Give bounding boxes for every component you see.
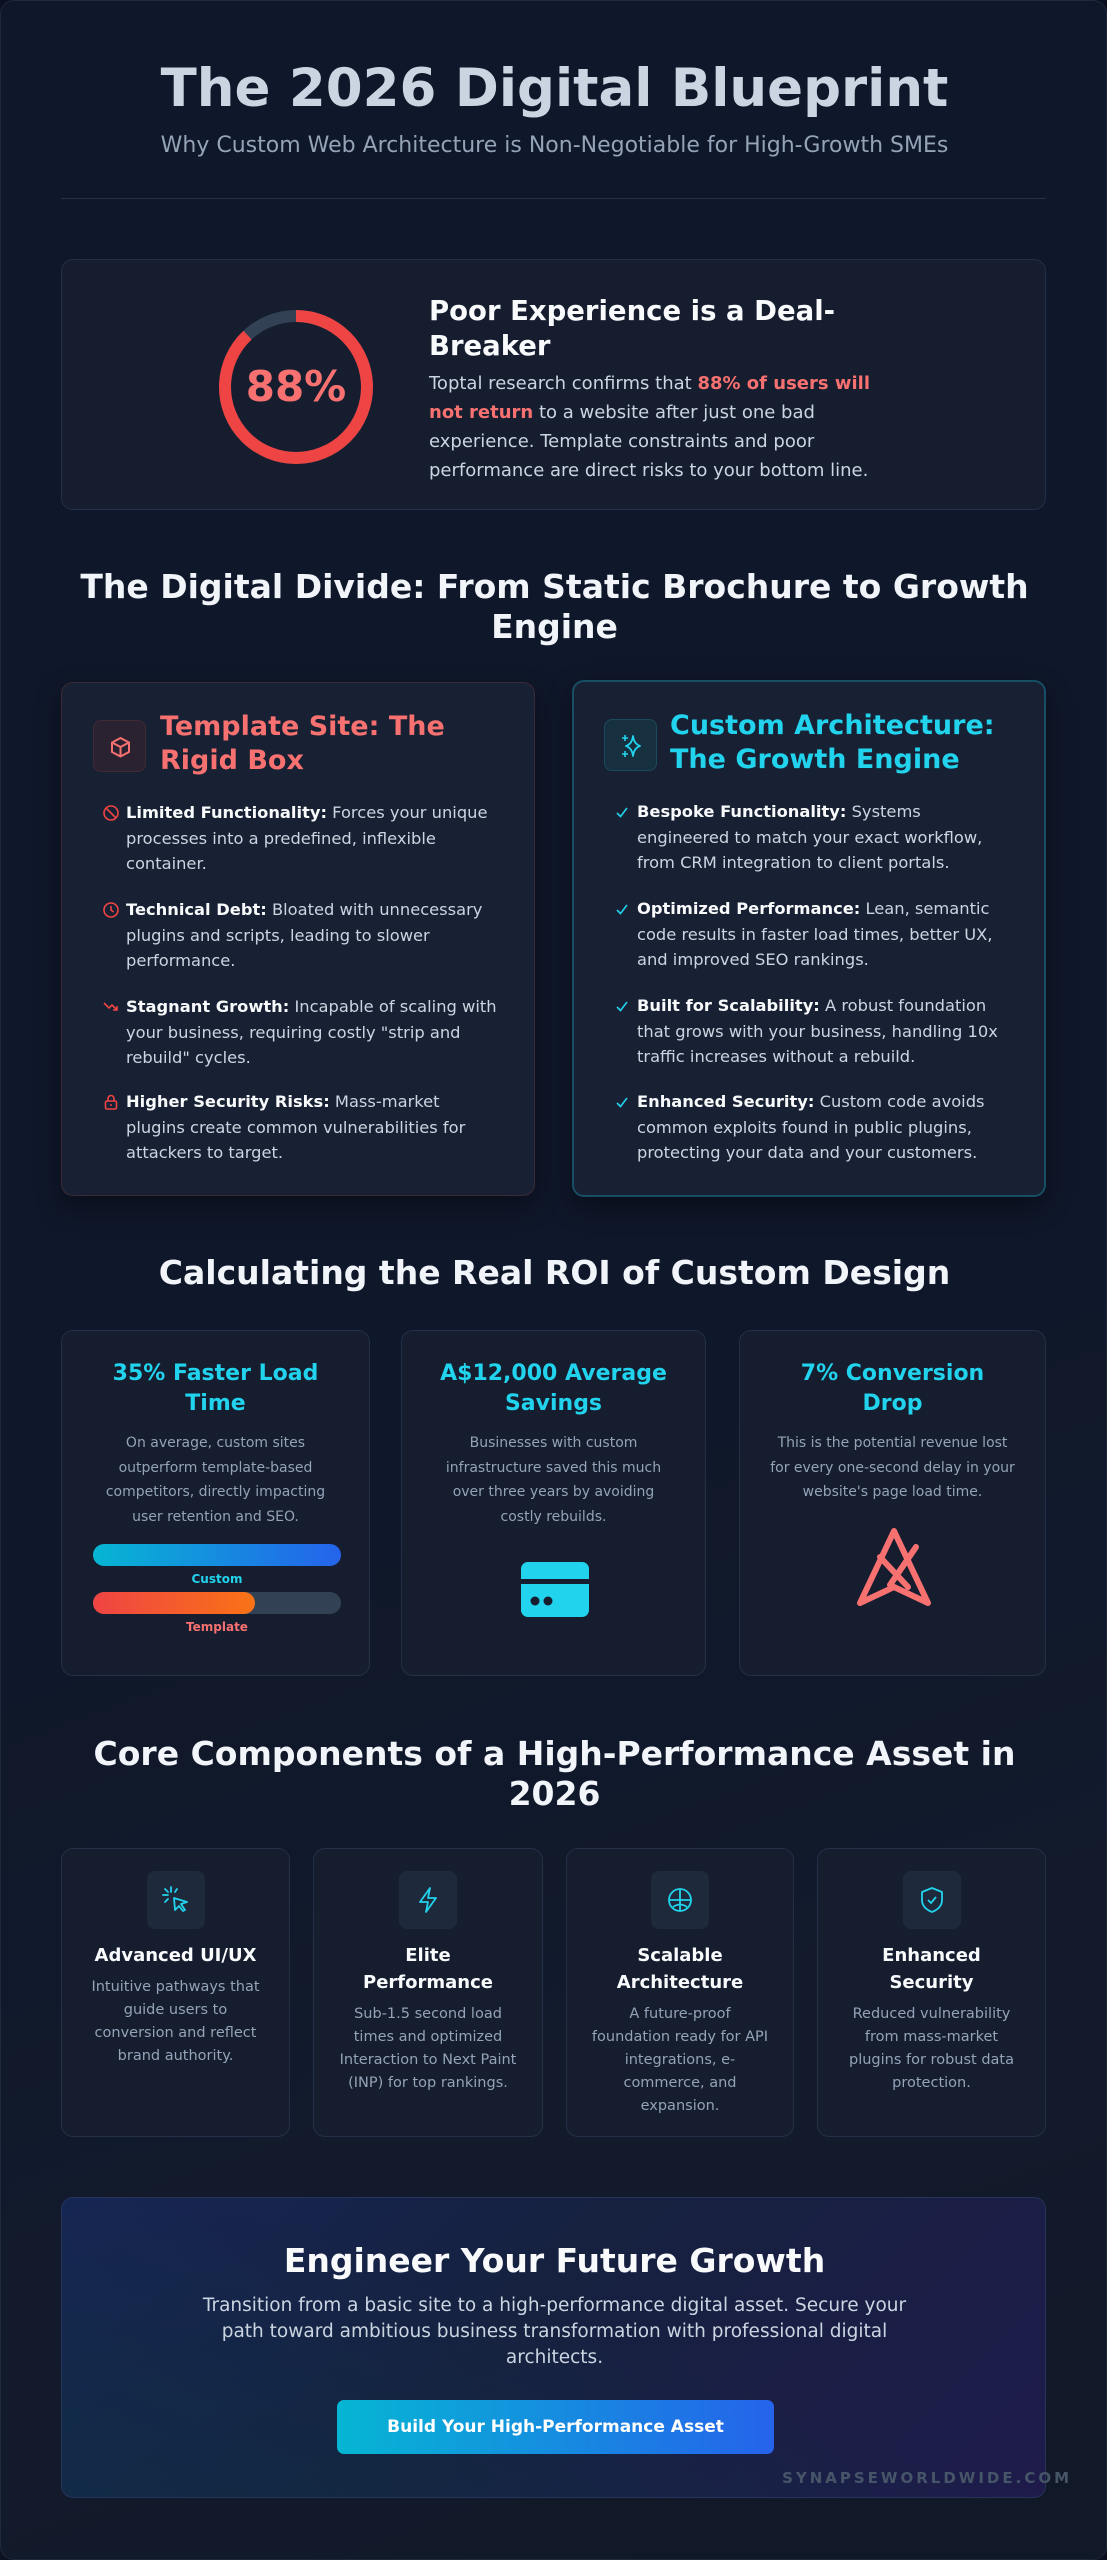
bar chart: custom vs template: Custom (192, 1572, 242, 1586)
card: 35% faster: On average, custom sites outperform template-based competitors, directly impacting user retention and SEO. (106, 1435, 325, 1524)
icon: box (93, 720, 146, 772)
card: advanced UI/UX (61, 1848, 290, 2137)
card: 35% faster (61, 1330, 370, 1676)
card: scalable architecture: A future-proof foundation ready for API integrations, e-commerce, and expansion. (592, 2006, 768, 2114)
heading: core components: Core Components of a High-Performance Asset in 2026 (94, 1734, 1015, 1813)
heading: digital divide: The Digital Divide: From Static Brochure to Growth Engine (80, 567, 1029, 646)
icon: wallet (521, 1562, 589, 1617)
panel: custom architecture (572, 680, 1046, 1197)
item: scalability: Built for Scalability: A robust foundation that grows with your business, handling 10x traffic increases without a rebuild. (637, 996, 998, 1066)
card: scalable architecture (566, 1848, 794, 2137)
card: elite performance (313, 1848, 543, 2137)
panel: CTA (61, 2197, 1046, 2498)
panel title: Custom Architecture: The Growth Engine (670, 710, 995, 775)
icon: shield (902, 1871, 960, 1929)
item: stagnant growth: Stagnant Growth: Incapable of scaling with your business, requiring costly "strip and rebuild" cycles. (126, 997, 497, 1067)
card: savings: Businesses with custom infrastructure saved this much over three years by avoiding costly rebuilds. (446, 1435, 661, 1524)
card: elite performance: Elite Performance (363, 1945, 493, 1993)
icon: sparkles (604, 719, 657, 771)
card: conversion drop: This is the potential revenue lost for every one-second delay in your website's page load time. (770, 1435, 1015, 1500)
CTA heading: Engineer Your Future Growth (284, 2241, 825, 2280)
card: conversion drop: 7% Conversion Drop (801, 1361, 984, 1416)
item: security risks: Higher Security Risks: Mass-market plugins create common vulnerabilities for attackers to target. (126, 1092, 465, 1162)
CTA button: Build Your High-Performance Asset (387, 2417, 724, 2437)
donut chart 88% (219, 310, 373, 464)
bar chart: custom vs template (93, 1544, 341, 1634)
icon: lightning (399, 1871, 457, 1929)
item: bespoke functionality: Bespoke Functionality: Systems engineered to match your exact workflow, from CRM integration to client portals. (637, 802, 982, 872)
card: enhanced security: Reduced vulnerability from mass-market plugins for robust data protection. (849, 2006, 1014, 2091)
card: 35% faster: Template (186, 1620, 248, 1634)
card: advanced UI/UX: Advanced UI/UX (95, 1945, 256, 1966)
card: 35% faster: 35% Faster Load Time (113, 1361, 318, 1416)
item: technical debt: Technical Debt: Bloated with unnecessary plugins and scripts, leading to slower performance. (126, 900, 482, 970)
panel: poor experience (61, 259, 1046, 510)
item: limited functionality: Limited Functionality: Forces your unique processes into a predefined, inflexible container. (126, 803, 488, 873)
card: enhanced security (817, 1848, 1046, 2137)
icon: pointer (146, 1871, 204, 1929)
card: advanced UI/UX: Intuitive pathways that guide users to conversion and reflect brand authority. (91, 1979, 260, 2064)
icon: globe (651, 1871, 709, 1929)
panel title: Template Site: The Rigid Box (160, 711, 445, 776)
card: savings (401, 1330, 706, 1676)
CTA text: Transition from a basic site to a high-performance digital asset. Secure your path toward ambitious business transformation with professional digital architects. (203, 2295, 906, 2368)
card: enhanced security: Enhanced Security (882, 1945, 981, 1993)
body text: Toptal research confirms that 88% of users will not return to a website after just one bad experience. Template constraints and poor performance are direct risks to your bottom line. (429, 373, 870, 481)
card: savings: A$12,000 Average Savings (440, 1361, 667, 1416)
footer: brand: SYNAPSEWORLDWIDE.COM (782, 2469, 1072, 2487)
heading: Poor Experience is a Deal-Breaker (429, 295, 835, 362)
CTA button (337, 2400, 774, 2454)
card: conversion drop (739, 1330, 1046, 1676)
donut chart 88%: 88% (246, 362, 346, 411)
title: The 2026 Digital Blueprint (161, 58, 948, 119)
subtitle: Why Custom Web Architecture is Non-Negotiable for High-Growth SMEs (161, 133, 948, 158)
card: elite performance: Sub-1.5 second load times and optimized Interaction to Next Paint (INP) for top rankings. (340, 2006, 516, 2091)
heading: ROI: Calculating the Real ROI of Custom Design (159, 1253, 950, 1292)
item: optimized performance: Optimized Performance: Lean, semantic code results in faster load times, better UX, and improved SEO rankings. (637, 899, 992, 969)
icon: broken arrow (857, 1528, 931, 1606)
card: scalable architecture: Scalable Architecture (617, 1945, 743, 1993)
panel: template site (61, 682, 535, 1196)
item: enhanced security: Enhanced Security: Custom code avoids common exploits found in public plugins, protecting your data and your customers. (637, 1092, 985, 1162)
